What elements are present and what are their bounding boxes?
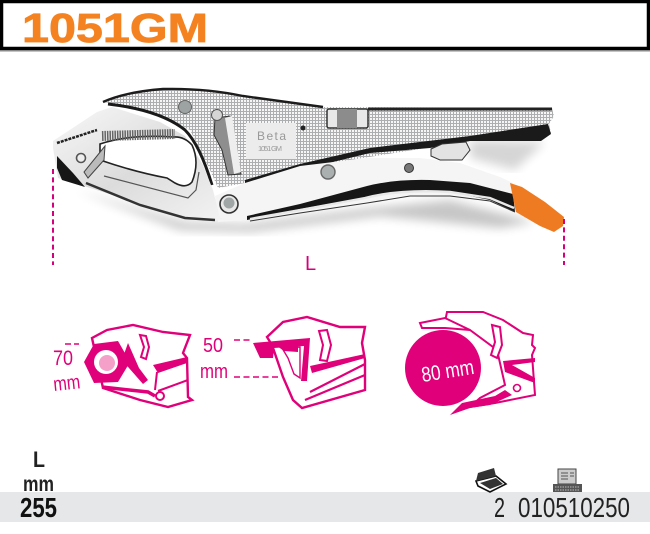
70 mm label — [52, 344, 81, 396]
title: 1051GM — [22, 5, 208, 51]
title bar — [0, 2, 650, 52]
Beta label plate — [246, 123, 296, 159]
value: 255: 255 — [20, 492, 57, 523]
50 mm label — [200, 335, 281, 383]
column header: L mm — [23, 447, 54, 496]
Beta label plate: 1051 GM — [258, 144, 282, 153]
pliers photo — [53, 89, 564, 232]
icon: 70 mm nut in jaws — [52, 325, 192, 407]
column header: L mm: L — [33, 447, 45, 472]
icon: box — [476, 468, 506, 492]
80 mm label: 80 mm — [420, 356, 476, 387]
drop shadow — [75, 190, 535, 232]
dimension line L — [53, 169, 564, 275]
upper handle: mesh plate — [103, 89, 554, 188]
icon: computer — [553, 469, 582, 492]
Beta label plate: Beta — [257, 129, 286, 143]
icon: 80 mm circle in jaws — [405, 312, 535, 415]
column header: L mm: mm — [23, 473, 54, 496]
release lever — [431, 142, 470, 160]
70 mm label: mm — [52, 371, 81, 396]
value: pack quantity: 2 — [494, 492, 505, 523]
data band — [0, 492, 650, 522]
L label: L — [305, 253, 316, 275]
70 mm label: 70 — [53, 347, 73, 370]
50 mm label: 50 — [203, 335, 223, 357]
knurled adjuster — [327, 109, 368, 128]
jaws — [53, 107, 243, 221]
icon: 50 mm profile in jaws — [200, 317, 365, 408]
rivet and slot — [178, 100, 192, 114]
50 mm label: mm — [200, 361, 228, 383]
orange grip — [510, 183, 564, 232]
lower handle — [215, 158, 516, 222]
